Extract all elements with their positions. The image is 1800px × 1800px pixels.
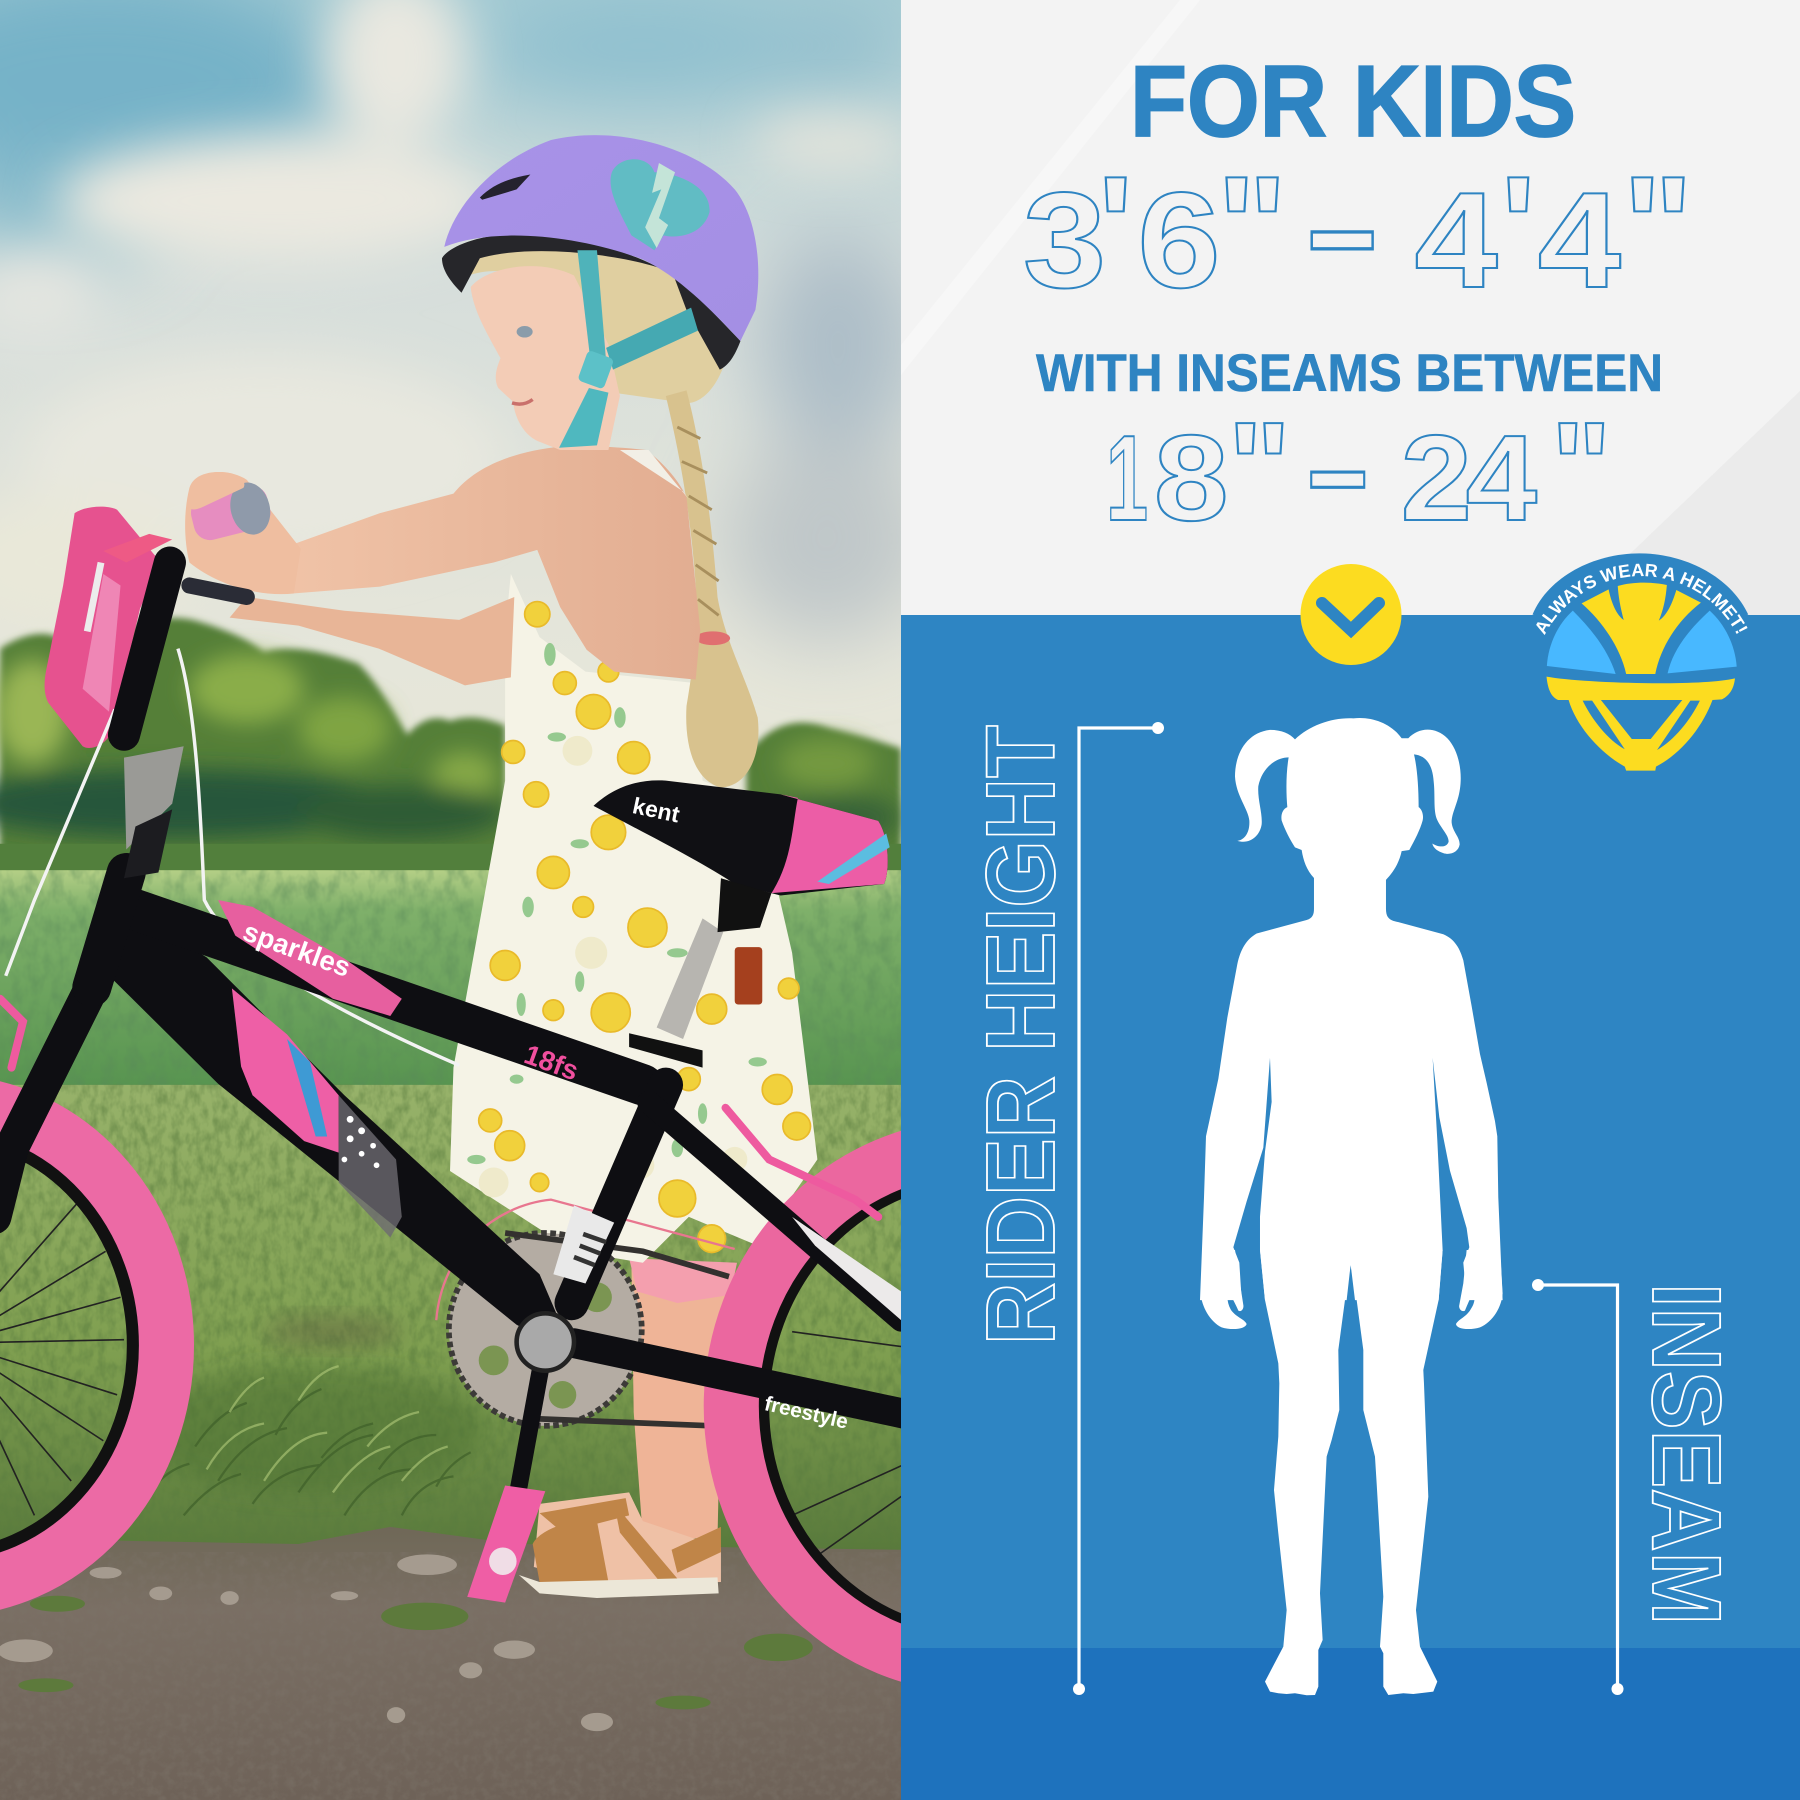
photo: brake cables [6, 649, 459, 1065]
height range outline text: 4 [1415, 165, 1498, 316]
icon: always wear a helmet badge [1532, 553, 1748, 771]
photo: front wheel [0, 1102, 166, 1589]
photo: teal helmet straps [559, 250, 698, 448]
height range outline text: 3 [1023, 165, 1106, 316]
subheading: with inseams between: WITH INSEAMS BETWEEN [1036, 344, 1663, 403]
icon: white child silhouette [1200, 718, 1503, 1695]
photo: saddle [594, 780, 890, 932]
panel: photo of girl with pink bicycle [0, 0, 901, 1800]
photo: tree line [0, 618, 901, 872]
height range outline text: " [1217, 149, 1288, 300]
photo: grass [0, 1085, 901, 1567]
heading: for kids: FOR KIDS [1130, 46, 1576, 158]
panel: blue sizing background [901, 615, 1800, 1800]
inseam range outline text: " [1551, 397, 1612, 533]
photo: pink frame graphics [218, 900, 901, 1320]
inseam range outline text: 1 [1106, 409, 1148, 546]
photo: face and neck [471, 266, 620, 450]
photo: shoulder, back and arms [230, 446, 700, 685]
height range outline text: 4 [1538, 165, 1621, 316]
inseam range outline text: " [1228, 398, 1291, 534]
inseam bracket line [1532, 1279, 1624, 1695]
height range outline text: 6 [1137, 165, 1221, 316]
inseam range outline text: 8 [1154, 411, 1229, 547]
photo: black bike frame [0, 563, 907, 1487]
photo: corn field [0, 870, 901, 1094]
inseam range outline text: – [1308, 383, 1367, 555]
photo: pink brake caliper [0, 999, 878, 1217]
height range outline text: ' [1500, 149, 1536, 300]
photo: rear wheel [704, 1130, 901, 1682]
photo: frame lettering: sparkles [239, 916, 355, 983]
rider height label: RIDER HEIGHT [966, 725, 1075, 1345]
photo: hand and handlebar grip [185, 472, 301, 594]
inseam range outline text: 2 [1401, 410, 1472, 546]
photo: chainring and chain [436, 1200, 735, 1426]
rider height bracket line [1073, 722, 1164, 1695]
photo: purple helmet [442, 135, 758, 370]
icon: always wear a helmet badge: ALWAYS WEAR A HELMET! [1536, 564, 1748, 635]
photo: braid and hair [468, 249, 758, 788]
height range outline text: ' [1098, 149, 1133, 300]
photo: frame lettering: freestyle [762, 1392, 850, 1434]
panel: light header background [901, 0, 1800, 616]
photo: headset and seat post [124, 746, 762, 1371]
photo: frame lettering [239, 916, 850, 1434]
photo: frame lettering: 18fs [520, 1038, 583, 1086]
inseam range outline text: 4 [1466, 410, 1537, 546]
icon: yellow chevron circle [1300, 564, 1402, 665]
photo: pink pedal [467, 1486, 545, 1603]
photo: saddle: kent [630, 792, 682, 828]
height range outline text: " [1623, 149, 1693, 300]
photo: sky and clouds [0, 0, 930, 872]
height range outline text [1023, 134, 1693, 323]
inseam label: INSEAM [1632, 1283, 1741, 1625]
photo: dirt path [0, 1527, 901, 1800]
photo: barcode sticker [553, 1205, 614, 1283]
photo: dress with lemon print [450, 574, 817, 1263]
height range outline text: – [1308, 134, 1376, 323]
photo: pink handlebar bag [45, 507, 172, 748]
inseam range outline text [1106, 383, 1612, 555]
photo: girl's legs and sandal [519, 1258, 737, 1598]
